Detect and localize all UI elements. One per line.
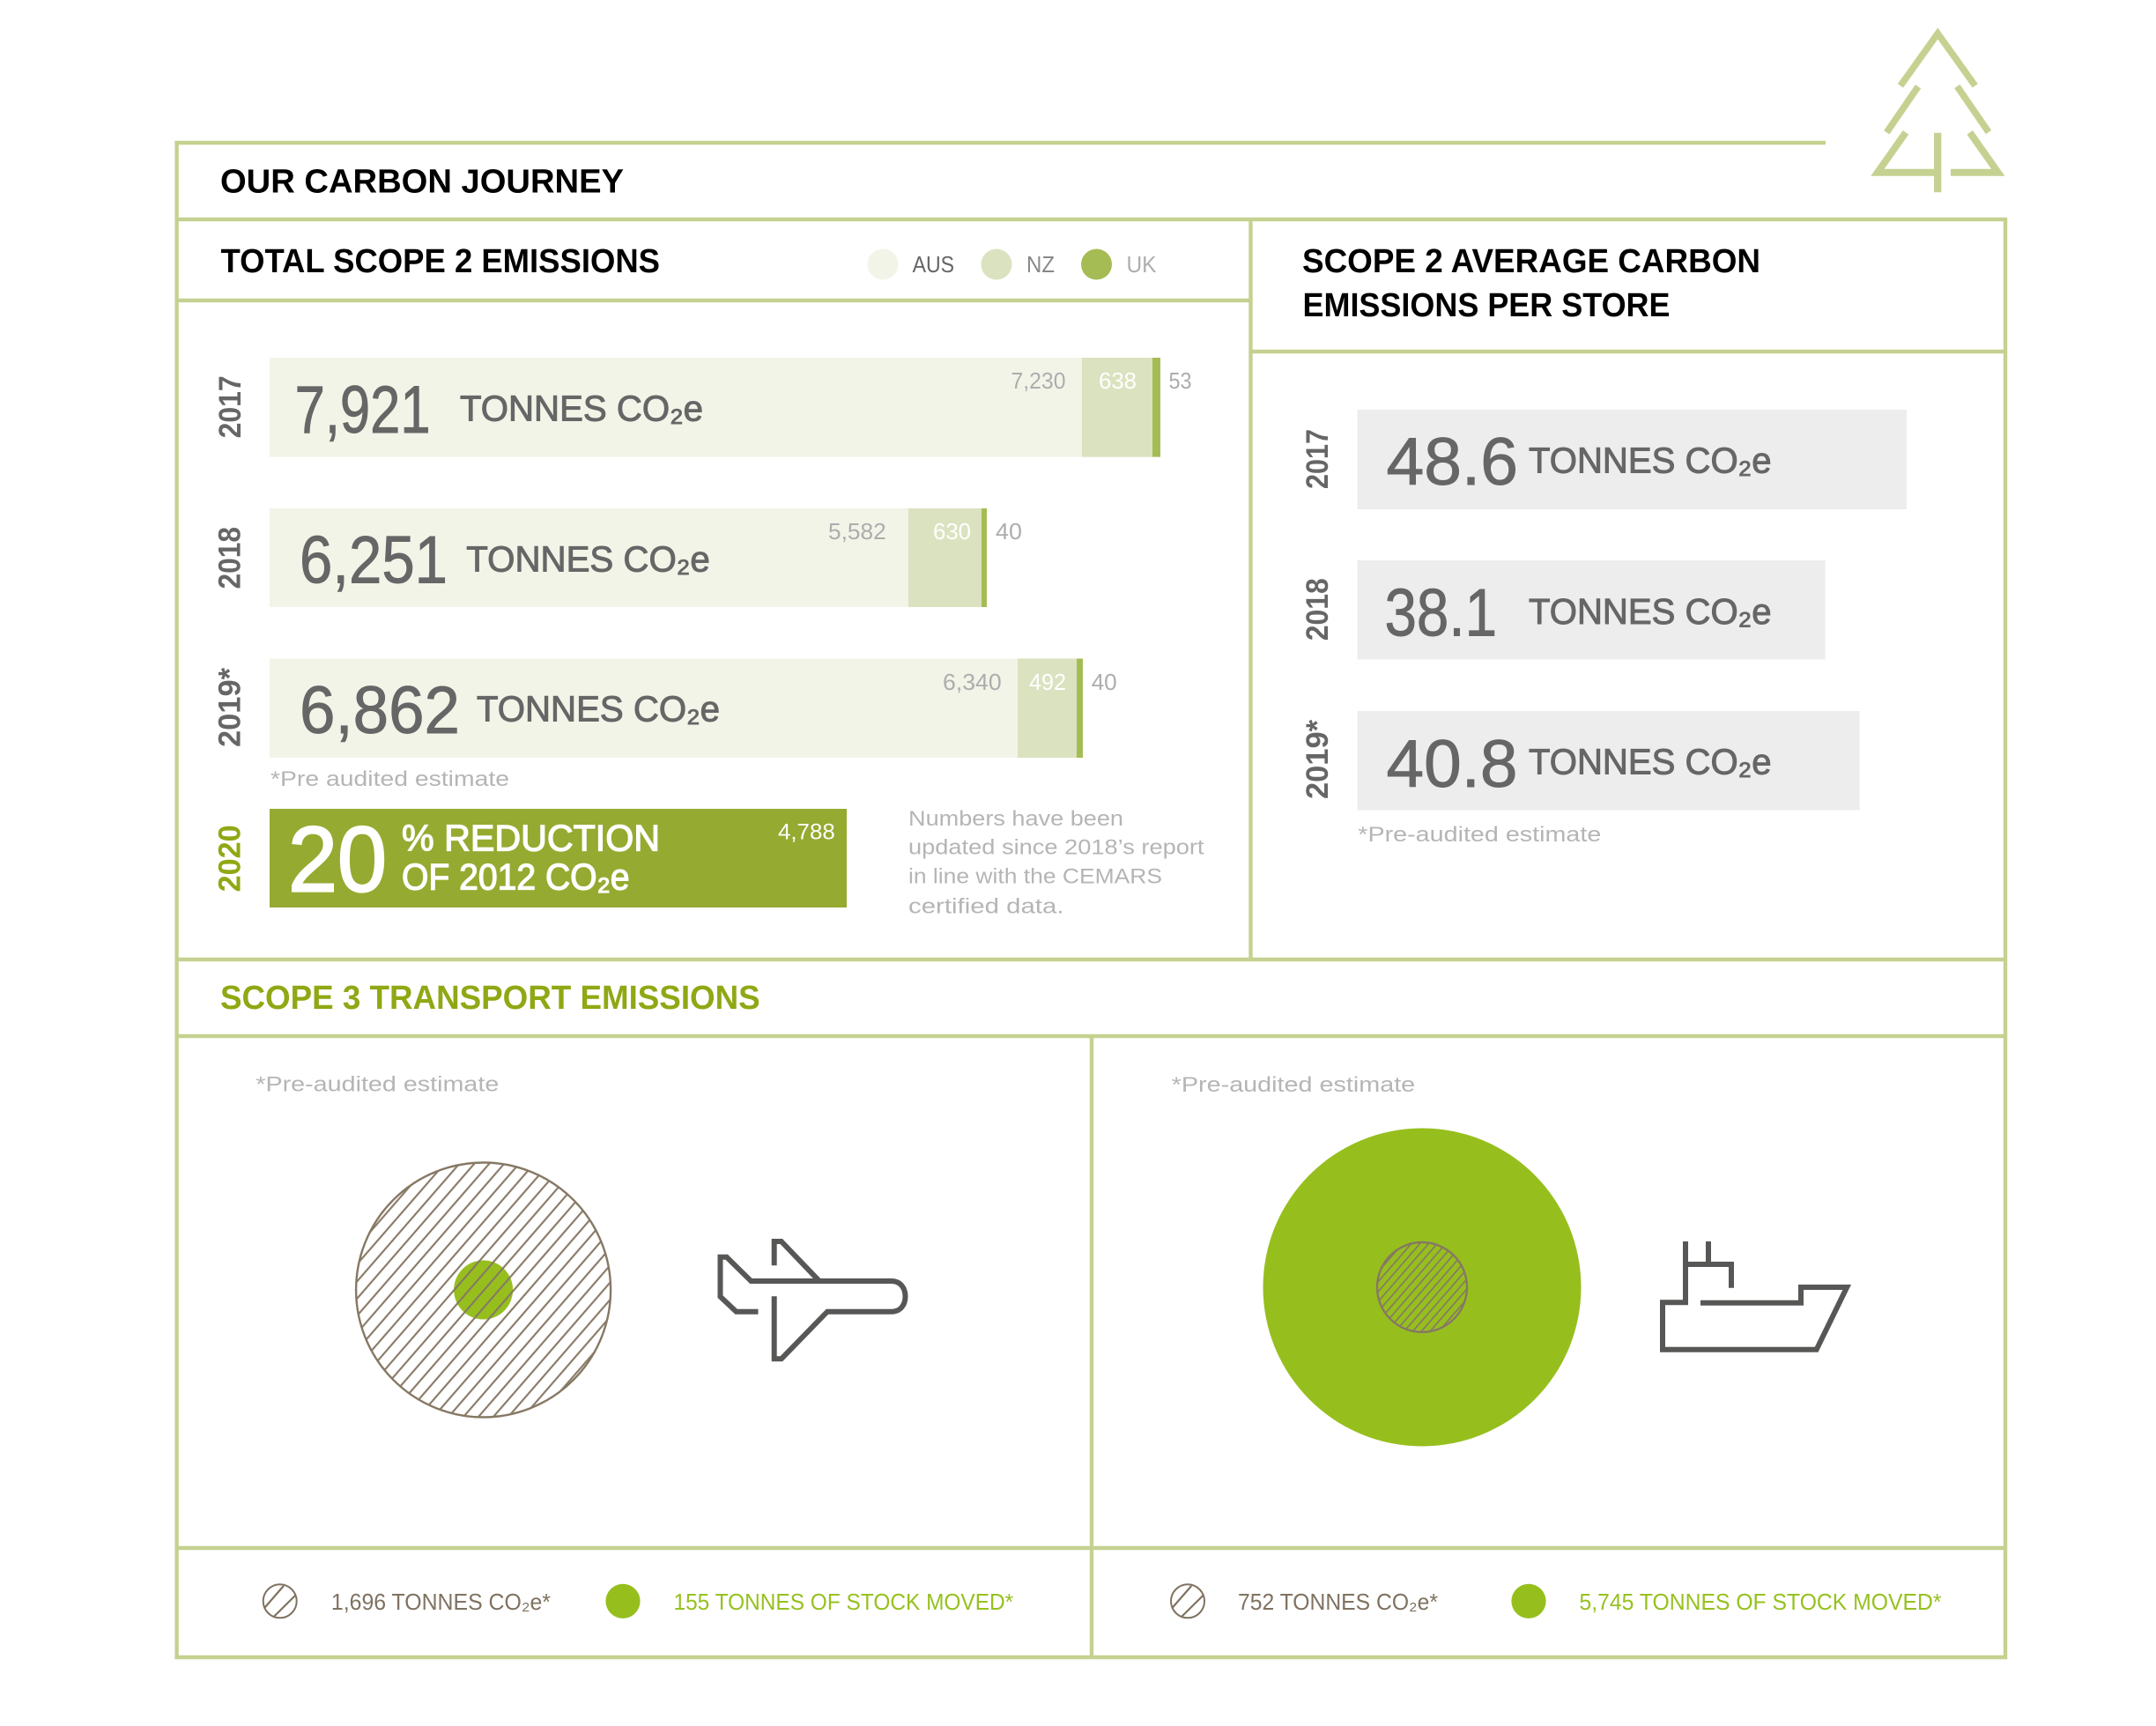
bar row: 2019: 40	[1092, 669, 1117, 695]
store row: 2017: 2017	[1300, 429, 1335, 489]
store row: 2019	[1300, 711, 1860, 811]
legend: sea: 752 TONNES CO₂e*	[1238, 1589, 1438, 1615]
legend: air	[263, 1584, 1013, 1619]
title: OUR CARBON JOURNEY	[220, 164, 624, 201]
store row: 2018	[1300, 560, 1826, 659]
legend: air: 155 TONNES OF STOCK MOVED*	[673, 1589, 1013, 1615]
chart: sea proportion circles	[1263, 1128, 1581, 1447]
store row: 2019: 2019*	[1300, 720, 1335, 799]
store row: 2017: 48.6	[1387, 425, 1518, 500]
panel: air transport	[256, 1073, 1013, 1619]
note: numbers updated: updated since 2018’s report	[908, 836, 1204, 860]
store row: 2017: TONNES CO₂e	[1529, 441, 1771, 481]
bar row: 2018: TONNES CO₂e	[466, 539, 710, 580]
target bar: 2020: OF 2012 CO₂e	[402, 856, 629, 898]
note: numbers updated	[908, 807, 1204, 918]
bar row: 2018: 6,251	[300, 522, 448, 597]
legend: sea	[1171, 1584, 1942, 1619]
icon: ship	[1663, 1241, 1847, 1350]
store row: 2019: 40.8	[1387, 727, 1517, 802]
bar row: 2017: 638	[1099, 367, 1137, 394]
target bar: 2020: 2020	[213, 825, 248, 892]
legend: NZ	[1026, 251, 1055, 278]
store row: 2018: 2018	[1300, 578, 1335, 641]
bar row: 2019: 6,862	[300, 673, 460, 748]
footnote: *Pre-audited estimate	[256, 1073, 499, 1096]
panel: scope 2 average per store	[1300, 243, 1907, 847]
bar row: 2018	[213, 508, 1022, 607]
legend: air: 1,696 TONNES CO₂e*	[331, 1589, 551, 1615]
footnote: *Pre-audited estimate	[1172, 1073, 1415, 1097]
footnote: *Pre-audited estimate	[1358, 823, 1601, 847]
target bar: 2020: 20	[288, 808, 387, 911]
bar row: 2017	[213, 358, 1191, 457]
bar row: 2017: TONNES CO₂e	[460, 388, 703, 428]
legend: UK	[1126, 251, 1157, 278]
legend: sea: 5,745 TONNES OF STOCK MOVED*	[1579, 1589, 1942, 1615]
panel: sea transport	[1171, 1073, 1942, 1619]
store row: 2018: 38.1	[1385, 576, 1497, 651]
bar row: 2018: 2018	[213, 527, 248, 589]
bar row: 2019: 6,340	[943, 669, 1002, 695]
note: numbers updated: in line with the CEMARS	[908, 865, 1162, 888]
chart: air proportion circles	[356, 1163, 611, 1417]
target bar: 2020: 4,788	[778, 819, 835, 844]
panel: total scope 2 emissions	[213, 243, 1204, 918]
bar row: 2017: 7,230	[1011, 367, 1066, 394]
footnote: *Pre audited estimate	[270, 767, 509, 791]
bar row: 2019: TONNES CO₂e	[477, 689, 720, 730]
store row: 2018: TONNES CO₂e	[1529, 591, 1771, 632]
legend	[867, 248, 1157, 280]
bar row: 2018: 40	[996, 518, 1022, 544]
bar row: 2017: 2017	[213, 375, 248, 438]
icon: plane	[721, 1241, 906, 1359]
heading: per store: EMISSIONS PER STORE	[1302, 287, 1671, 324]
bar row: 2019	[213, 659, 1117, 758]
target bar: 2020: % REDUCTION	[402, 818, 660, 859]
icon: tree logo	[1878, 33, 1998, 192]
bar row: 2018: 630	[933, 518, 971, 544]
bar row: 2019: 492	[1029, 669, 1066, 695]
note: numbers updated: certified data.	[908, 894, 1064, 918]
store row: 2019: TONNES CO₂e	[1529, 742, 1771, 782]
note: numbers updated: Numbers have been	[908, 807, 1123, 831]
store row: 2017	[1300, 410, 1907, 509]
legend: AUS	[913, 251, 954, 278]
bar row: 2017: 7,921	[295, 373, 431, 448]
heading: scope 3: SCOPE 3 TRANSPORT EMISSIONS	[220, 980, 760, 1017]
bar row: 2017: 53	[1168, 367, 1191, 394]
heading: total scope 2: TOTAL SCOPE 2 EMISSIONS	[220, 243, 660, 280]
target bar: 2020	[213, 808, 847, 911]
heading: per store: SCOPE 2 AVERAGE CARBON	[1302, 243, 1760, 280]
heading: per store	[1302, 243, 1760, 324]
bar row: 2018: 5,582	[828, 518, 886, 544]
bar row: 2019: 2019*	[213, 668, 248, 747]
